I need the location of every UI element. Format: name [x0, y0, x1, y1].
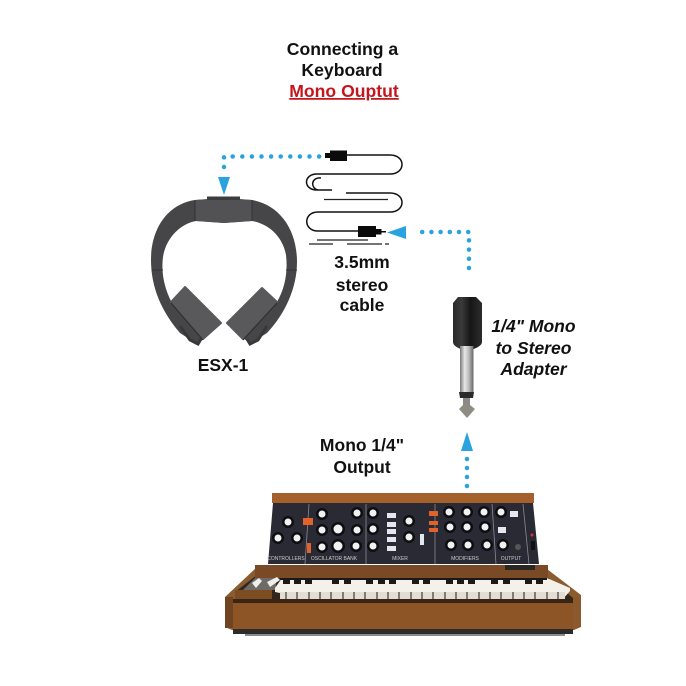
- arrow: keyboard to adapter: [461, 432, 473, 486]
- label: Mono 1/4 inch output: Output: [333, 457, 391, 477]
- icon: stereo cable: [306, 150, 402, 244]
- label: 3.5mm stereo cable: [334, 252, 390, 315]
- title: Connecting a: [287, 39, 398, 59]
- label: Mono 1/4 inch output: [320, 435, 404, 477]
- control panel: [267, 493, 539, 564]
- arrow: adapter to cable: [387, 226, 469, 268]
- title: Keyboard: [301, 60, 383, 80]
- label: adapter: 1/4" Mono: [491, 316, 576, 336]
- control panel: MIXER: [392, 556, 408, 562]
- control panel: OUTPUT: [501, 556, 521, 562]
- label: adapter: to Stereo: [496, 338, 572, 358]
- keys: [275, 578, 570, 599]
- title: Mono Ouptut: [289, 81, 399, 101]
- label: Mono 1/4 inch output: Mono 1/4": [320, 435, 404, 455]
- label: ESX-1: ESX-1: [198, 355, 249, 375]
- arrow: cable to headphones: [218, 156, 322, 195]
- synth case: [225, 565, 581, 636]
- control panel: OSCILLATOR BANK: [311, 556, 358, 562]
- title: [287, 39, 399, 101]
- label: 3.5mm stereo cable: stereo: [336, 275, 388, 295]
- label: 3.5mm stereo cable: 3.5mm: [334, 252, 390, 272]
- label: adapter: [491, 316, 576, 379]
- control panel: CONTROLLERS: [267, 556, 305, 562]
- icon: mono to stereo adapter: [453, 297, 482, 418]
- icon: synthesizer keyboard: [225, 493, 581, 636]
- control panel: MODIFIERS: [451, 556, 480, 562]
- label: adapter: Adapter: [499, 359, 568, 379]
- label: 3.5mm stereo cable: cable: [340, 295, 385, 315]
- icon: headphones: [151, 196, 297, 344]
